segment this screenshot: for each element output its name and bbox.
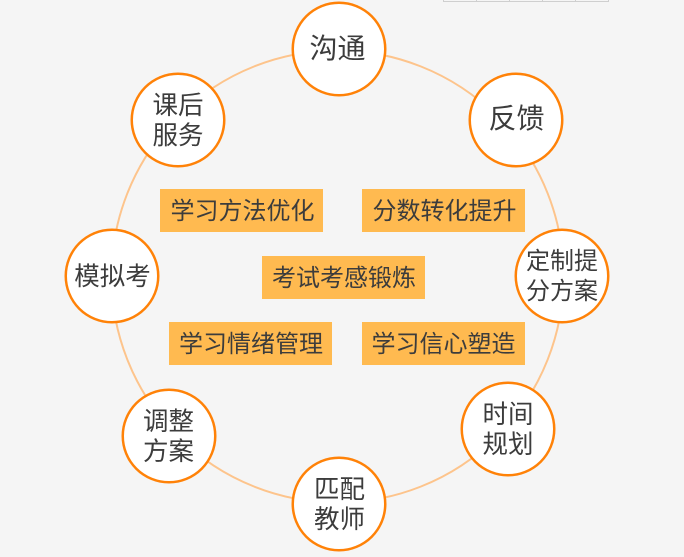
node: 匹配教师 bbox=[292, 456, 386, 550]
node: 沟通: 沟通 bbox=[309, 33, 366, 64]
node: 反馈 bbox=[469, 72, 563, 166]
label: 学习情绪管理 bbox=[169, 322, 332, 365]
label: 学习情绪管理: 学习情绪管理 bbox=[179, 331, 323, 358]
node: 时间规划: 时间 bbox=[482, 401, 534, 429]
node: 模拟考: 模拟考 bbox=[74, 263, 151, 291]
node: 定制提分方案: 分方案 bbox=[526, 278, 598, 305]
label: 考试考感锻炼: 考试考感锻炼 bbox=[272, 265, 416, 292]
node: 调整方案: 调整 bbox=[143, 408, 194, 436]
node: 调整方案 bbox=[122, 389, 216, 483]
label: 学习信心塑造 bbox=[362, 322, 525, 365]
node: 定制提分方案: 定制提 bbox=[526, 248, 598, 275]
node: 时间规划: 规划 bbox=[482, 431, 534, 459]
node: 沟通 bbox=[292, 2, 386, 96]
node: 匹配教师: 教师 bbox=[314, 506, 365, 534]
node: 模拟考 bbox=[65, 229, 159, 323]
table fragment at top edge bbox=[443, 0, 609, 2]
label: 分数转化提升: 分数转化提升 bbox=[372, 198, 516, 225]
node: 匹配教师: 匹配 bbox=[314, 476, 365, 504]
node: 时间规划 bbox=[461, 382, 555, 476]
label: 分数转化提升 bbox=[362, 189, 525, 232]
node: 课后服务: 课后 bbox=[152, 92, 204, 120]
node: 调整方案: 方案 bbox=[143, 438, 194, 466]
label: 学习方法优化: 学习方法优化 bbox=[170, 198, 314, 225]
label: 学习方法优化 bbox=[160, 189, 323, 232]
node: 反馈: 反馈 bbox=[488, 102, 544, 134]
label: 考试考感锻炼 bbox=[262, 256, 425, 299]
node: 课后服务: 服务 bbox=[152, 122, 204, 150]
label: 学习信心塑造: 学习信心塑造 bbox=[372, 331, 516, 358]
node: 课后服务 bbox=[131, 73, 225, 167]
node: 定制提分方案 bbox=[515, 229, 609, 323]
